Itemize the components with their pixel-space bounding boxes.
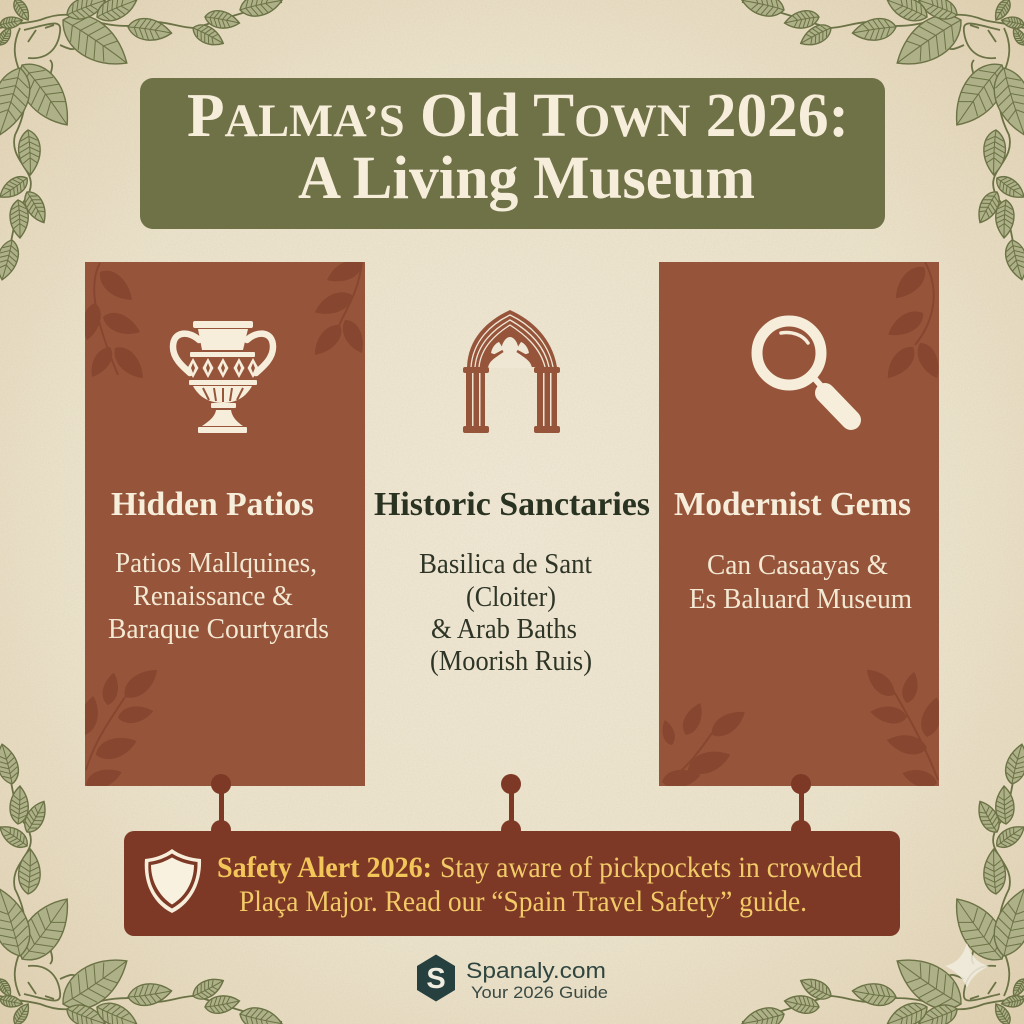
panel heading: Historic Sanctaries — [374, 486, 650, 523]
panel: modernist gems — [659, 261, 946, 794]
panel body text: Basilica de Sant — [419, 548, 592, 580]
panel: historic sanctuaries — [374, 310, 650, 677]
connector: middle — [501, 774, 521, 840]
title line 1: PALMA’S Old TOWN 2026: — [187, 82, 849, 150]
panel body text: (Moorish Ruis) — [430, 645, 592, 677]
brand tagline: Your 2026 Guide — [471, 983, 608, 1002]
connector: left — [211, 774, 231, 840]
panel heading: Modernist Gems — [674, 486, 911, 523]
panel leaf sprigs — [659, 261, 946, 791]
panel body text: Es Baluard Museum — [689, 583, 912, 615]
panel heading: Hidden Patios — [111, 486, 314, 523]
panel body text — [689, 549, 912, 615]
connector: right — [791, 774, 811, 840]
title line 2: A Living Museum — [298, 145, 755, 212]
corner vine: bottom right — [740, 742, 1024, 1024]
panel: hidden patios — [76, 255, 369, 794]
corner vine: bottom left — [0, 742, 284, 1024]
panel body text: Baraque Courtyards — [108, 613, 329, 645]
panel body text: (Cloiter) — [466, 581, 556, 613]
alert text line 1: Stay aware of pickpockets in crowded — [440, 851, 862, 884]
title banner — [140, 78, 885, 229]
alert text line 1: Safety Alert 2026: — [217, 851, 432, 884]
panel body text: Renaissance & — [133, 580, 293, 612]
brand name: Spanaly.com — [466, 958, 606, 983]
panel body text — [419, 548, 592, 677]
panel body text: Can Casaayas & — [707, 549, 888, 581]
corner vine: top right — [740, 0, 1024, 282]
icon: hexagon logo — [417, 954, 455, 1002]
icon: amphora vase — [173, 321, 273, 433]
icon: magnifying glass — [757, 321, 851, 420]
alert text line 1 — [217, 851, 862, 884]
panel body text: Patios Mallquines, — [115, 547, 317, 579]
icon: gothic arch — [463, 310, 560, 433]
icon: shield — [145, 849, 201, 913]
panel body text: & Arab Baths — [431, 613, 577, 645]
safety alert box — [124, 831, 900, 936]
sparkle mark — [945, 943, 989, 988]
corner vine: top left — [0, 0, 284, 282]
panel leaf sprigs — [76, 255, 369, 793]
alert text line 2: Plaça Major. Read our “Spain Travel Safety” guide. — [239, 885, 807, 918]
panel body text — [108, 547, 329, 645]
logo: spanaly — [417, 954, 608, 1002]
icon: hexagon logo: S — [426, 963, 446, 995]
